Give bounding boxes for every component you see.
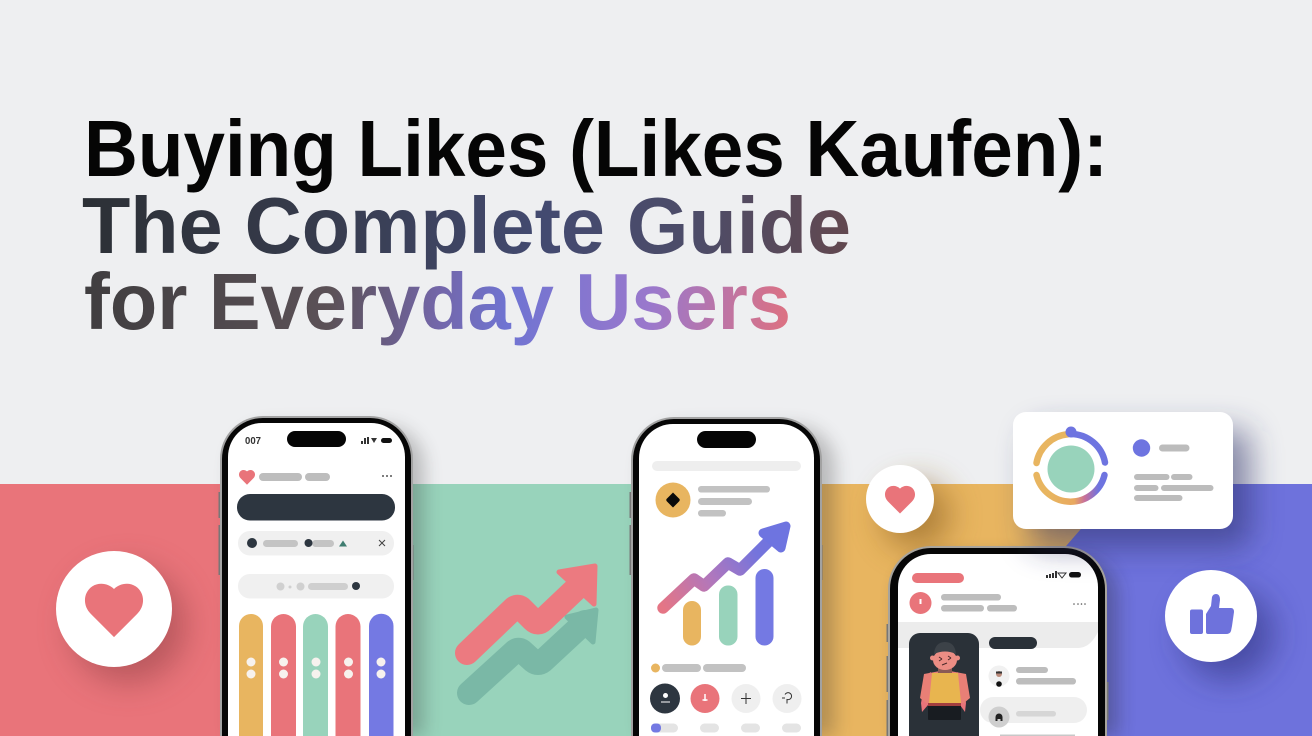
arrow: growth arrows on green <box>467 566 596 693</box>
dark portrait card <box>909 633 979 736</box>
status time: 007 <box>245 435 261 447</box>
phone 2: growth chart app <box>630 417 835 736</box>
band: blue <box>1000 484 1312 736</box>
phone 3 frame <box>888 546 1107 736</box>
dynamic island <box>697 431 756 448</box>
title line 2: The Complete Guide <box>82 181 851 270</box>
row 1 <box>238 531 394 556</box>
band: red <box>0 484 300 736</box>
card body <box>1013 412 1233 529</box>
card text pills <box>1134 444 1214 501</box>
legend row <box>651 664 746 672</box>
title <box>82 104 1108 346</box>
red arrow <box>467 566 595 653</box>
character <box>920 642 970 720</box>
action buttons <box>650 684 802 714</box>
dark label pill <box>989 637 1037 649</box>
grey band <box>898 622 1098 648</box>
title line 3: for Everyday Users <box>84 257 791 346</box>
bottom tabs <box>651 724 801 732</box>
phone 1 screen <box>228 423 405 736</box>
stats card <box>1013 412 1250 547</box>
red title pill <box>912 573 964 583</box>
status icons <box>361 437 392 444</box>
profile badge <box>910 592 932 614</box>
heart <box>239 470 255 485</box>
phone 1: bar app <box>218 416 424 736</box>
donut chart <box>1036 426 1105 502</box>
dynamic island <box>287 431 346 447</box>
shadow arrow <box>469 610 596 693</box>
header pills <box>259 473 330 481</box>
phone 2 frame <box>631 417 822 736</box>
status icons <box>1046 571 1081 578</box>
list item 2 <box>980 697 1087 728</box>
coloured bars <box>239 614 394 736</box>
avatar <box>656 482 690 518</box>
phone 2 screen <box>639 424 814 736</box>
text pills <box>698 486 770 516</box>
more dots <box>1073 603 1086 605</box>
band: orange <box>730 484 1120 736</box>
list item 3 <box>1000 734 1075 736</box>
phone 3: profile app <box>886 546 1118 736</box>
card dot <box>1133 439 1150 457</box>
colour bands <box>0 484 1312 736</box>
dark bar <box>237 494 395 520</box>
search bar <box>652 461 801 471</box>
icon: large heart badge <box>56 551 186 683</box>
bar chart <box>683 569 774 646</box>
profile pills <box>941 594 1017 612</box>
row 2 <box>238 574 394 598</box>
icon: thumbs up badge <box>1165 570 1274 680</box>
title line 1: Buying Likes (Likes Kaufen): <box>84 104 1108 193</box>
phone 1 frame <box>220 416 413 736</box>
phone 3 screen <box>898 554 1098 736</box>
list item 1 <box>988 666 1076 687</box>
more dots <box>382 475 392 477</box>
arrow: trend line <box>663 526 786 608</box>
band: green <box>300 484 730 736</box>
icon: small heart badge <box>866 465 950 549</box>
